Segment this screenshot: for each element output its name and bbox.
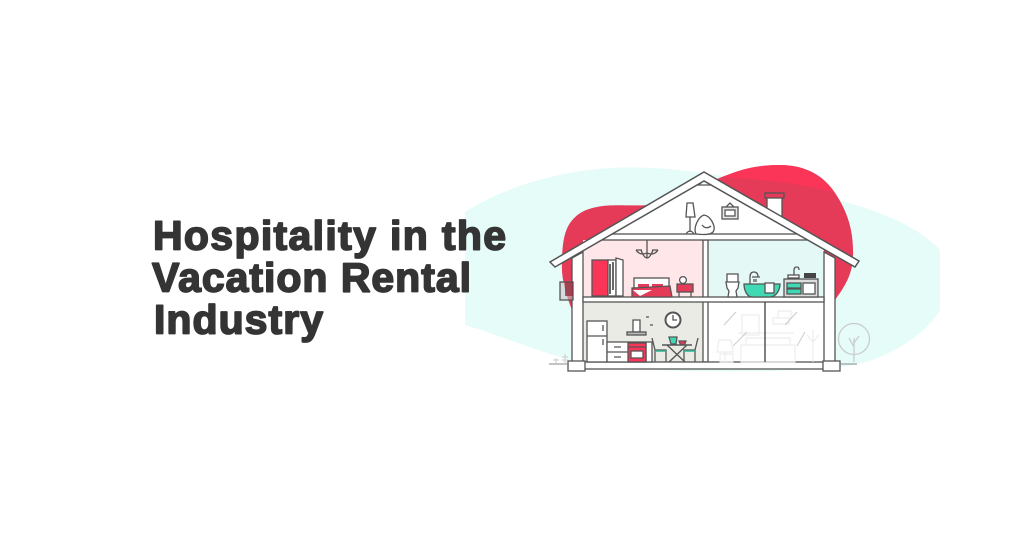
toilet bbox=[726, 274, 739, 297]
attic interior bbox=[592, 178, 815, 242]
attic floor lamp bbox=[686, 203, 695, 234]
red background blob bbox=[562, 165, 853, 310]
title bbox=[152, 212, 506, 342]
house walls bbox=[572, 234, 835, 369]
chimney bbox=[765, 193, 784, 220]
bathtub with shower bbox=[744, 272, 780, 297]
steam dashes bbox=[646, 317, 653, 325]
living room bbox=[708, 302, 824, 362]
red bowl bbox=[679, 341, 686, 345]
ground line right bbox=[840, 363, 857, 365]
roof apex detail bbox=[698, 181, 711, 185]
title line 1: Hospitality in the bbox=[153, 212, 506, 258]
bright red blob highlight bbox=[722, 165, 834, 192]
kitchen fridge bbox=[587, 321, 607, 362]
ceiling chandelier bbox=[636, 240, 658, 258]
outside wall box bbox=[560, 282, 573, 300]
foundation blocks bbox=[568, 361, 840, 371]
kitchen room bbox=[583, 302, 703, 362]
title line 2: Vacation Rental bbox=[152, 254, 471, 300]
cooker hood bbox=[627, 320, 646, 335]
ground line left bbox=[549, 363, 568, 365]
mint background blob bbox=[465, 167, 940, 372]
nightstand with alarm clock bbox=[677, 277, 693, 297]
roof bbox=[550, 172, 859, 267]
window glass reflections bbox=[724, 312, 805, 346]
title line 3: Industry bbox=[154, 296, 323, 342]
wall clock bbox=[666, 312, 680, 328]
kitchenette counter and sink bbox=[784, 267, 818, 297]
house illustration bbox=[549, 172, 870, 371]
lower floor partition bbox=[764, 302, 766, 362]
attic picture frame bbox=[722, 203, 738, 219]
dining table bbox=[662, 345, 692, 362]
outdoor plants bbox=[553, 354, 568, 363]
faded living room furniture bbox=[717, 311, 819, 362]
red wardrobe bbox=[592, 258, 623, 296]
outdoor tree bbox=[838, 324, 870, 362]
bedroom room bbox=[583, 240, 703, 297]
kitchen counters bbox=[607, 342, 652, 362]
teal chair seats bbox=[655, 350, 695, 352]
red oven bbox=[628, 343, 646, 362]
dining chairs bbox=[652, 338, 698, 362]
bed bbox=[632, 278, 672, 297]
bathroom and kitchenette room bbox=[708, 240, 824, 297]
teapot bbox=[669, 337, 677, 344]
attic bean bag bbox=[695, 215, 714, 235]
